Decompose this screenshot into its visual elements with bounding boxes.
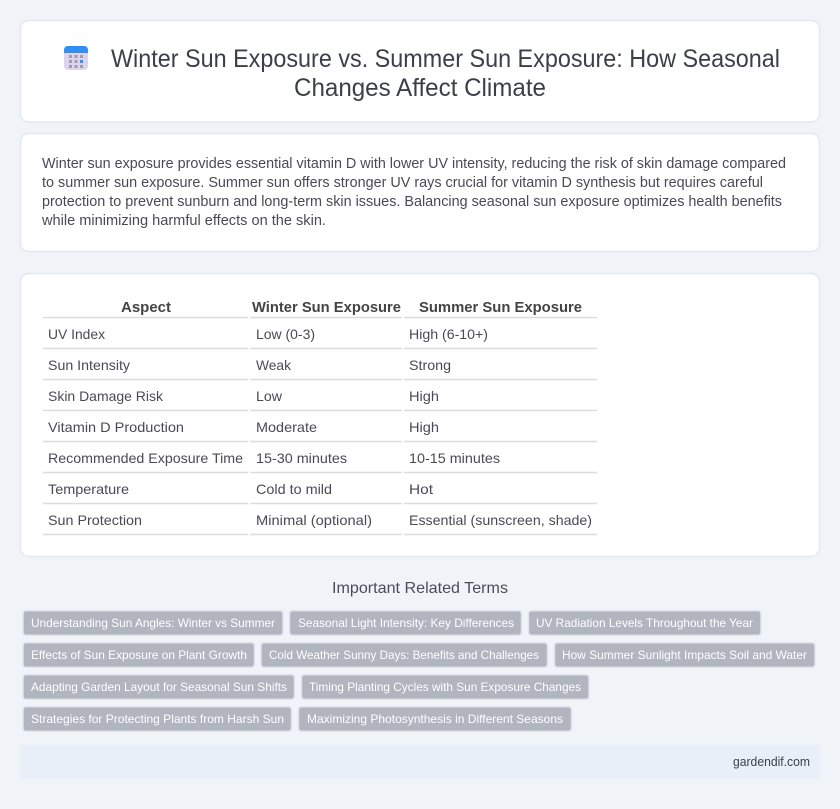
summary text: to summer sun exposure. Summer sun offers stronger UV rays crucial for vitamin D synthesis but requires careful xyxy=(42,175,763,191)
row: Sun Protection: Minimal (optional) xyxy=(256,512,372,528)
tag xyxy=(23,675,294,699)
tag: Seasonal Light Intensity: Key Differences xyxy=(298,616,514,630)
tag: Effects of Sun Exposure on Plant Growth xyxy=(31,648,247,662)
summary text xyxy=(41,156,786,229)
row: Skin Damage Risk xyxy=(48,388,439,404)
row: Skin Damage Risk: High xyxy=(409,388,439,404)
tag xyxy=(23,611,283,635)
row: Temperature: Temperature xyxy=(48,481,129,497)
title: Winter Sun Exposure vs. Summer Sun Exposure: How Seasonal xyxy=(111,45,780,73)
footer xyxy=(20,745,820,779)
panel: summary xyxy=(20,134,820,252)
row: Recommended Exposure Time: Recommended Exposure Time xyxy=(48,450,243,466)
row: Recommended Exposure Time: 10-15 minutes xyxy=(409,450,500,466)
footer: gardendif.com xyxy=(733,755,810,769)
panel: comparison table xyxy=(20,274,820,556)
tag xyxy=(554,643,815,667)
table header: Winter Sun Exposure xyxy=(252,299,401,316)
table header: Aspect xyxy=(121,299,171,316)
row: Vitamin D Production: Vitamin D Production xyxy=(48,419,184,435)
row: Recommended Exposure Time xyxy=(48,450,500,466)
tags: related terms xyxy=(23,611,815,731)
tag xyxy=(290,611,522,635)
row: Vitamin D Production: Moderate xyxy=(256,419,317,435)
title xyxy=(111,45,780,102)
row: Temperature: Cold to mild xyxy=(256,481,332,497)
tag: Strategies for Protecting Plants from Harsh Sun xyxy=(31,712,284,726)
row: UV Index xyxy=(48,326,488,342)
heading: related terms: Important Related Terms xyxy=(332,580,508,597)
tag xyxy=(302,675,589,699)
tag xyxy=(298,707,572,731)
summary text: while minimizing harmful effects on the skin. xyxy=(41,213,326,229)
tag xyxy=(23,707,292,731)
row: Vitamin D Production xyxy=(48,419,439,435)
row: Sun Protection xyxy=(48,512,592,528)
tag xyxy=(528,611,761,635)
row: Sun Intensity xyxy=(48,357,451,373)
row: UV Index: Low (0-3) xyxy=(256,326,315,342)
icon: calendar xyxy=(64,46,88,70)
summary text: Winter sun exposure provides essential vitamin D with lower UV intensity, reducing the risk of skin damage compared xyxy=(42,156,786,172)
row: Sun Intensity: Strong xyxy=(409,357,451,373)
row: Temperature xyxy=(48,481,433,497)
tag: How Summer Sunlight Impacts Soil and Water xyxy=(562,648,807,662)
row: Temperature: Hot xyxy=(409,481,433,497)
tag xyxy=(261,643,548,667)
tag: Timing Planting Cycles with Sun Exposure Changes xyxy=(309,680,581,694)
tag: UV Radiation Levels Throughout the Year xyxy=(536,616,753,630)
table header xyxy=(121,299,582,316)
row: Recommended Exposure Time: 15-30 minutes xyxy=(256,450,347,466)
row: Sun Protection: Essential (sunscreen, shade) xyxy=(409,512,592,528)
tag xyxy=(23,643,254,667)
row: Sun Intensity: Sun Intensity xyxy=(48,357,130,373)
summary text: protection to prevent sunburn and long-term skin issues. Balancing seasonal sun exposure optimizes health benefits xyxy=(42,194,782,210)
row: Sun Protection: Sun Protection xyxy=(48,512,142,528)
table header: Summer Sun Exposure xyxy=(419,299,582,316)
row: UV Index: UV Index xyxy=(48,326,105,342)
row: Vitamin D Production: High xyxy=(409,419,439,435)
panel: header xyxy=(20,20,820,122)
tag: Adapting Garden Layout for Seasonal Sun Shifts xyxy=(31,680,287,694)
tag: Understanding Sun Angles: Winter vs Summer xyxy=(31,616,275,630)
row: Sun Intensity: Weak xyxy=(256,357,292,373)
tag: Cold Weather Sunny Days: Benefits and Challenges xyxy=(269,648,539,662)
row: UV Index: High (6-10+) xyxy=(409,326,488,342)
title: Changes Affect Climate xyxy=(294,74,546,102)
row: Skin Damage Risk: Skin Damage Risk xyxy=(48,388,164,404)
tag: Maximizing Photosynthesis in Different Seasons xyxy=(307,712,563,726)
row: Skin Damage Risk: Low xyxy=(256,388,283,404)
